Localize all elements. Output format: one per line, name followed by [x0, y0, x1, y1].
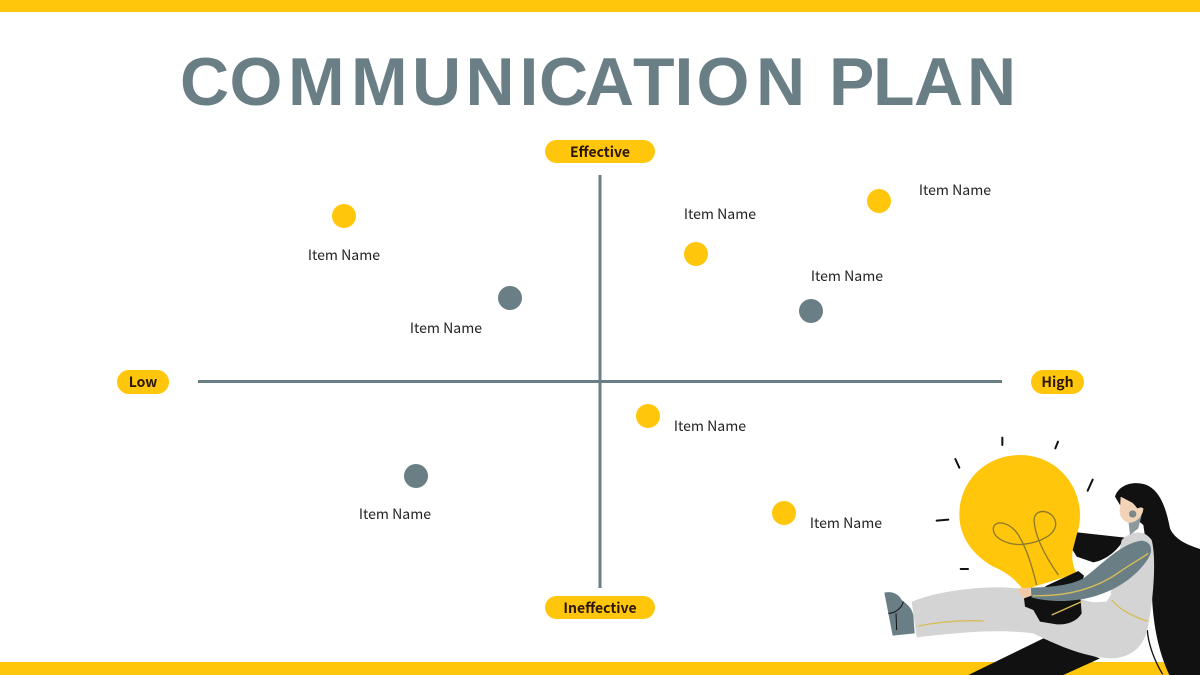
illustration: woman holding light bulb: [884, 438, 1200, 675]
title: COMMUNICATION PLAN: [180, 44, 1016, 120]
cheek: [1129, 510, 1136, 518]
torso and leg: [912, 532, 1154, 658]
top bar: [0, 0, 1200, 12]
data point: top right yellow far: Item Name: [919, 180, 991, 200]
axis label: Effective: Effective: [570, 142, 630, 162]
data point: lower right yellow near: [636, 404, 746, 436]
axis label: High: [1031, 370, 1084, 394]
quadrant chart: [117, 140, 1084, 619]
vertical axis: [598, 175, 602, 588]
data point: top right gray: Item Name: [811, 266, 883, 286]
far leg: [968, 638, 1100, 675]
axis label: Low: [117, 370, 169, 394]
axis label: Ineffective: [545, 596, 655, 619]
bottom bar: [0, 662, 1200, 675]
shoe lines: [888, 602, 903, 630]
sleeve seam: [1033, 553, 1148, 615]
data point: lower left gray: Item Name: [359, 504, 431, 524]
horizontal axis: [198, 380, 1002, 383]
face: [1120, 497, 1143, 523]
data point: top left gray: [410, 286, 522, 338]
fringe: [1117, 490, 1143, 508]
axis label: Effective: [545, 140, 655, 163]
axis label: High: High: [1041, 372, 1074, 392]
data point: lower left gray: [359, 464, 431, 524]
back arm: [1073, 532, 1125, 562]
shirt gap: [1083, 593, 1112, 602]
data point: lower right yellow near: Item Name: [674, 416, 746, 436]
light bulb: [959, 455, 1080, 590]
data point: top right gray: [799, 266, 883, 323]
data point: top right yellow centre: [684, 204, 756, 266]
trouser seam: [918, 600, 1148, 626]
data point: top right yellow far: [867, 180, 991, 213]
neck: [1128, 515, 1142, 535]
sleeve: [1031, 541, 1151, 601]
data point: top right yellow centre: Item Name: [684, 204, 756, 224]
data point: lower right yellow far: Item Name: [810, 513, 882, 533]
hair: [1115, 483, 1200, 675]
data point: lower right yellow far: [772, 501, 882, 533]
shoe: [884, 592, 915, 636]
book / dark sleeve: [1024, 571, 1084, 624]
data point: top left yellow: Item Name: [308, 245, 380, 265]
axis label: Low: Low: [129, 372, 157, 392]
data point: top left gray: Item Name: [410, 318, 482, 338]
stray strand: [1147, 630, 1163, 674]
rays: [937, 438, 1093, 569]
axis label: Ineffective: Ineffective: [563, 598, 637, 618]
data point: top left yellow: [308, 204, 380, 265]
hands: [1017, 588, 1032, 598]
